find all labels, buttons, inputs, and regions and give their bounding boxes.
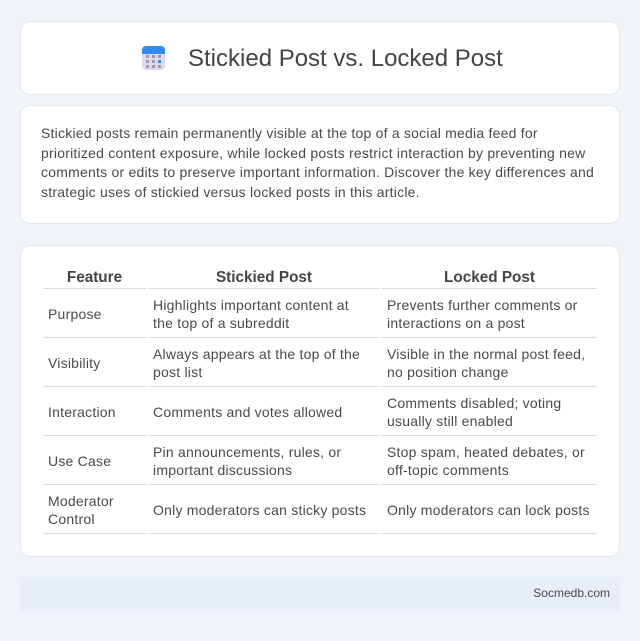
row: Interaction xyxy=(48,395,561,429)
row: Purpose: Purpose xyxy=(48,306,102,322)
row: Use Case: important discussions xyxy=(153,462,292,478)
row: Interaction: usually still enabled xyxy=(387,413,513,429)
row: Visibility: no position change xyxy=(387,364,508,380)
row: Moderator Control: Control xyxy=(48,511,95,527)
intro paragraph: strategic uses of stickied versus locked posts in this article. xyxy=(41,184,420,200)
row: Use Case: off-topic comments xyxy=(387,462,509,478)
table header: Feature xyxy=(67,269,122,286)
row: Moderator Control: Only moderators can sticky posts xyxy=(153,502,366,518)
row: Interaction: Comments and votes allowed xyxy=(153,404,342,420)
intro paragraph: comments or edits to preserve important information. Discover the key differences and xyxy=(41,164,594,180)
intro text panel xyxy=(20,105,620,224)
table header xyxy=(67,269,535,286)
row: Visibility: Visibility xyxy=(48,355,101,371)
row: Use Case: Use Case xyxy=(48,453,111,469)
row: Use Case: Pin announcements, rules, or xyxy=(153,444,341,460)
row: Interaction: Interaction xyxy=(48,404,116,420)
title: Stickied Post vs. Locked Post xyxy=(188,45,503,72)
row: Purpose: interactions on a post xyxy=(387,315,525,331)
row: Visibility: post list xyxy=(153,364,202,380)
table header: Locked Post xyxy=(444,269,535,286)
intro paragraph xyxy=(41,125,594,200)
row: Use Case xyxy=(48,444,585,478)
row: Moderator Control: Only moderators can lock posts xyxy=(387,502,590,518)
row: Moderator Control: Moderator xyxy=(48,493,114,509)
row: Visibility: Visible in the normal post feed, xyxy=(387,346,585,362)
row: Use Case: Stop spam, heated debates, or xyxy=(387,444,585,460)
row: Interaction: Comments disabled; voting xyxy=(387,395,561,411)
row: Purpose: Prevents further comments or xyxy=(387,297,578,313)
row: Moderator Control xyxy=(48,493,590,527)
row: Purpose: the top of a subreddit xyxy=(153,315,289,331)
row: Visibility: Always appears at the top of the xyxy=(153,346,360,362)
row: Purpose: Highlights important content at xyxy=(153,297,349,313)
icon: calendar xyxy=(142,46,165,70)
intro paragraph: prioritized content exposure, while locked posts restrict interaction by preventing new xyxy=(41,144,585,160)
footer source text: Socmedb.com xyxy=(533,586,610,600)
panel: comparison table xyxy=(20,245,620,557)
intro paragraph: Stickied posts remain permanently visible at the top of a social media feed for xyxy=(41,125,538,141)
table header: Stickied Post xyxy=(216,269,312,286)
header card xyxy=(20,21,620,95)
row: Purpose xyxy=(48,297,578,331)
footer bar xyxy=(20,577,620,611)
row: Visibility xyxy=(48,346,585,380)
